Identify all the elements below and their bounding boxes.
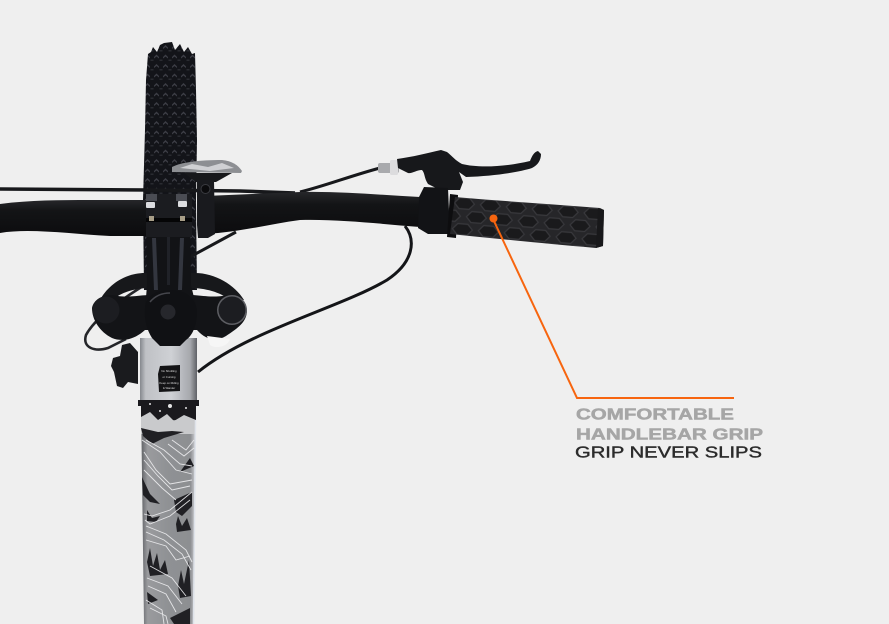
bicycle front assembly [0,42,604,624]
left brake caliper [111,343,138,388]
handlebar grip [450,197,604,248]
head tube badge [158,365,180,392]
engraved ridge lines [142,440,194,624]
bar clamp [418,187,450,234]
down tube artwork [138,400,199,624]
tube base [141,402,196,624]
callout leader line [490,214,734,398]
arch body [92,294,247,340]
brake lever assembly [378,150,541,238]
left cable loop [85,283,148,349]
collar stars [149,403,187,412]
head tube [140,338,197,402]
head tube badge: No Shuttling [161,369,177,373]
handlebar right section [205,192,420,234]
heading line 2: HANDLEBAR GRIP [576,426,763,444]
callout text [575,406,763,462]
long cable to frame [198,226,411,372]
right brake knob [217,295,247,325]
subheading: GRIP NEVER SLIPS [575,444,762,462]
top cap [145,290,197,346]
thin cable behind bar [0,189,295,193]
snow mountain peaks [141,412,196,434]
stem clamp bolts [146,194,192,237]
bell reflector [172,160,242,238]
grip flange [447,194,458,238]
silver barrel adjuster [378,160,399,175]
handlebar left section [0,200,150,236]
dark valleys [141,428,194,624]
heading line 1: COMFORTABLE [576,406,734,424]
head tube badge: Keep on Riding [159,381,179,385]
stem highlights [152,205,184,290]
rising brake cable [300,168,380,192]
head tube badge: or Cursing [163,375,176,379]
white brake pads [207,336,230,347]
head tube badge: & Wander [163,386,175,390]
left brake knob [92,296,120,324]
lower cable behind stem [188,232,236,258]
dark starry collar [138,400,199,420]
stem [145,200,197,310]
upper arch [100,273,244,300]
front tyre [143,42,197,290]
bell bracket [197,180,215,238]
brake arch [92,273,247,347]
lever body and blade [397,150,541,190]
tube edge highlight [194,420,196,624]
